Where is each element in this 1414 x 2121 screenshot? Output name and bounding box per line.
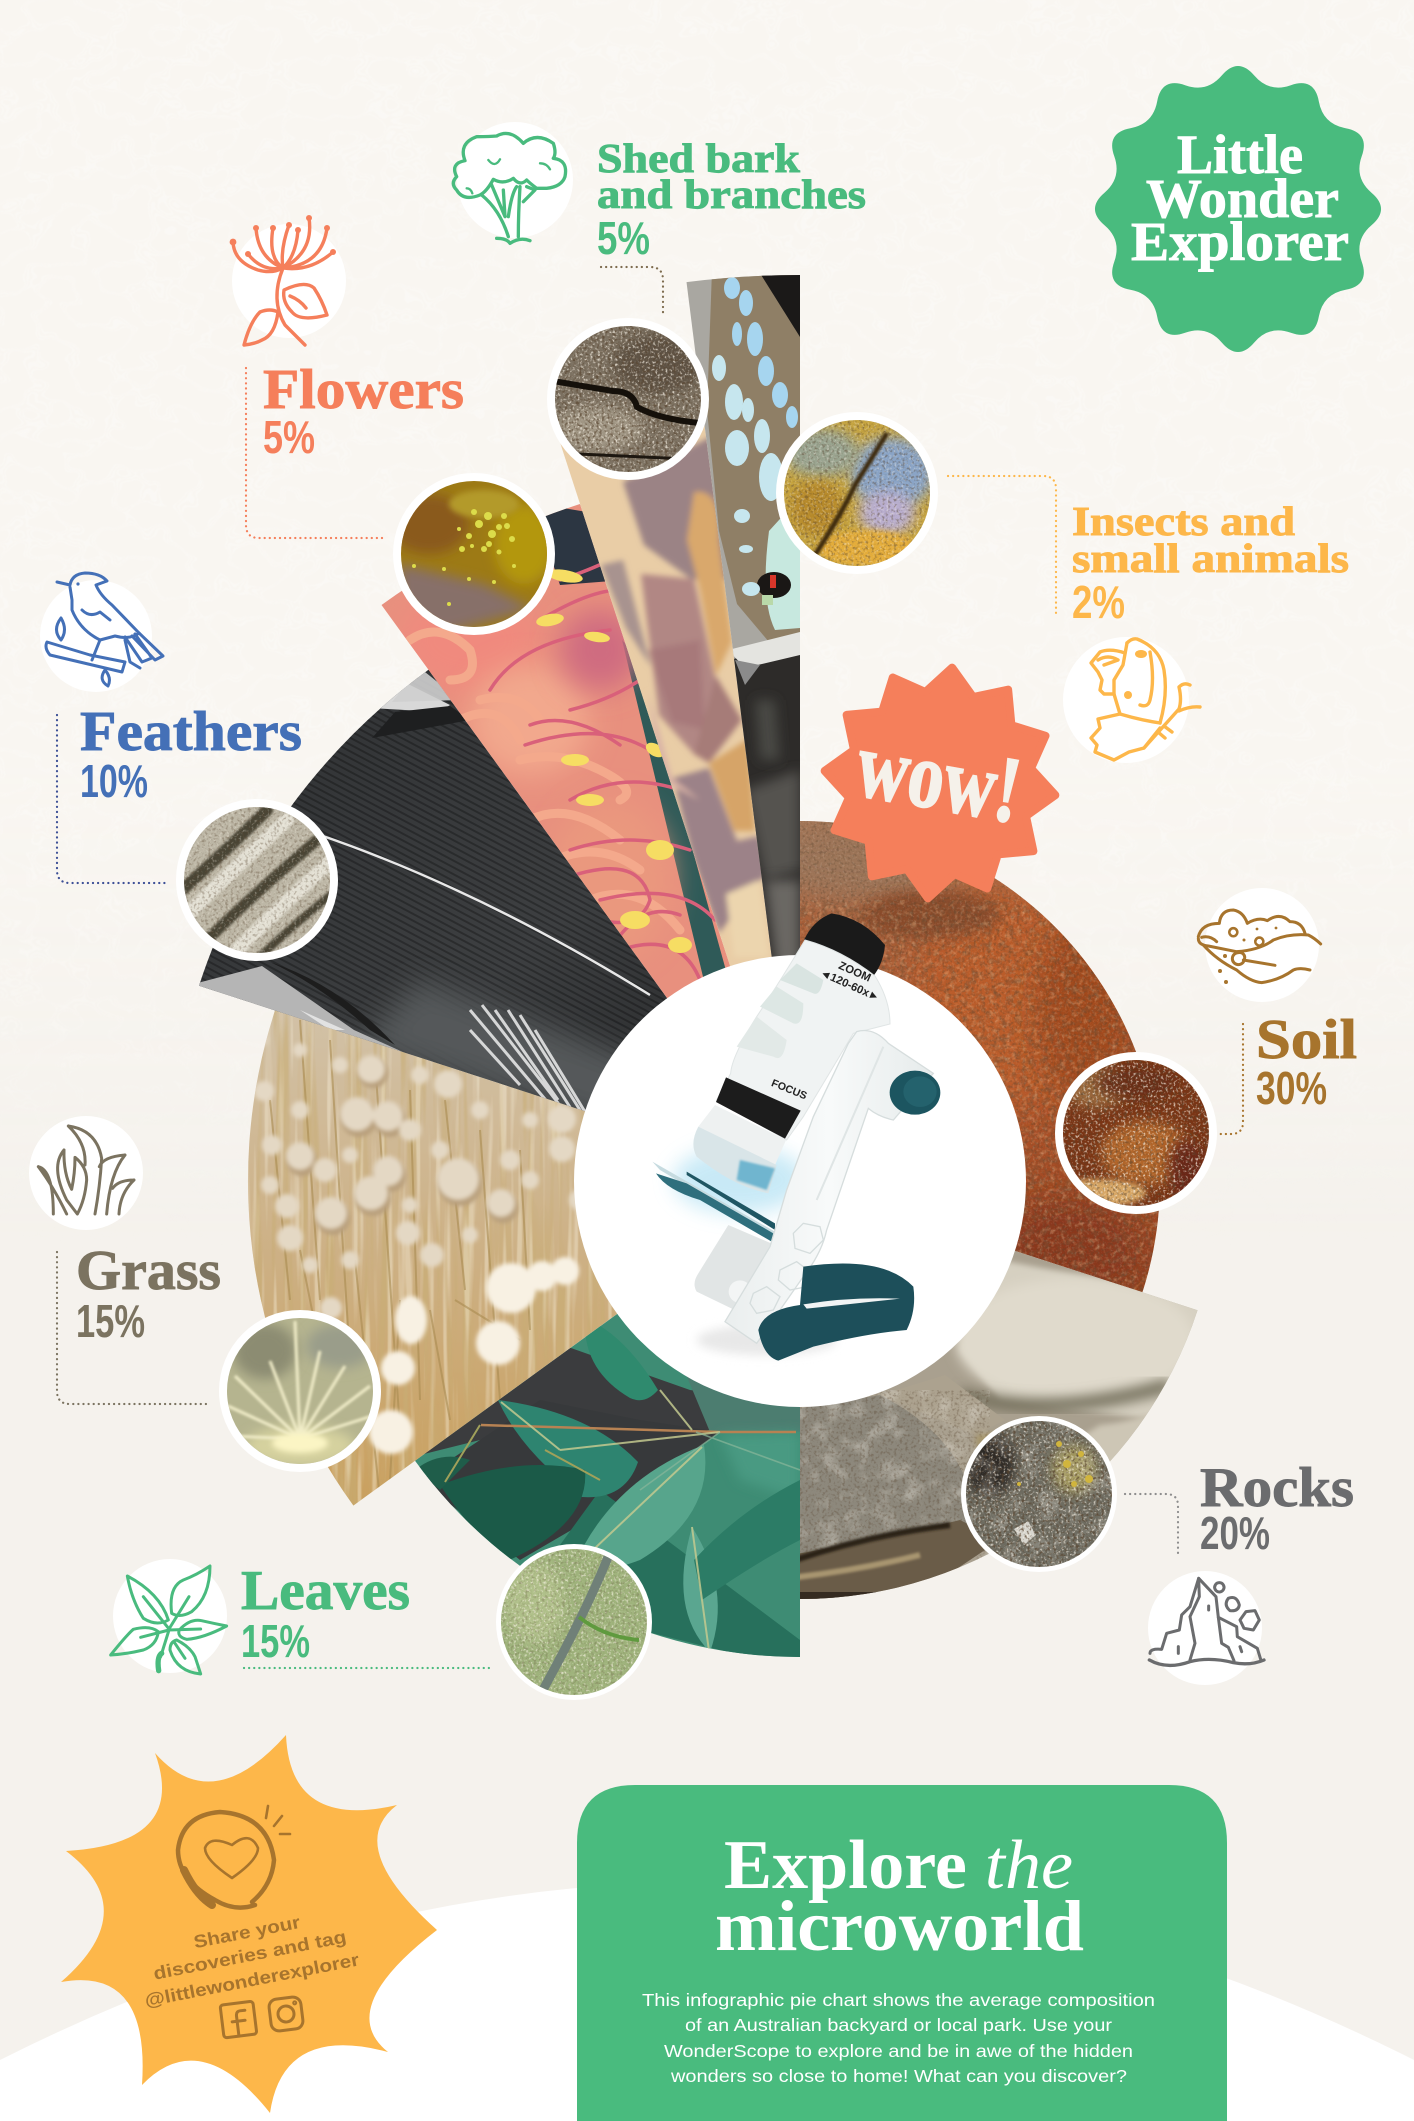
label: feathers: Feathers: [80, 701, 302, 763]
wow starburst: wow!: [849, 712, 1029, 843]
label: soil: 30%: [1256, 1062, 1327, 1114]
icon: tree: [453, 122, 573, 243]
icon: soil in hand: [1198, 888, 1321, 1002]
leader line: leaves: [244, 1667, 491, 1669]
label: feathers: 10%: [80, 755, 148, 807]
panel body text: WonderScope to explore and be in awe of the hidden: [664, 2041, 1133, 2061]
panel heading: microworld: [715, 1886, 1084, 1966]
label: insects and small animals: small animals: [1072, 535, 1349, 581]
callout circle: grass micro: [219, 1310, 381, 1472]
callout circle: bark micro: [547, 318, 709, 480]
label: shed bark and branches: and branches: [597, 171, 866, 217]
eyepiece cap: [804, 913, 885, 976]
microscope: ◄120-60x►: [818, 967, 881, 1004]
callout circle: insects micro: [776, 412, 938, 574]
label: flowers: 5%: [263, 411, 315, 463]
label: grass: [76, 1240, 221, 1347]
slide stage: [652, 1162, 775, 1237]
logo badge: Little Wonder Explorer: [1096, 67, 1380, 351]
panel body text: wonders so close to home! What can you discover?: [670, 2066, 1127, 2086]
icon: heart in speech ring: [178, 1806, 290, 1908]
leader line: rocks: [1125, 1494, 1178, 1557]
label: insects and small animals: [1072, 498, 1349, 628]
pie slice: grass 15%: [248, 1010, 618, 1506]
pie slice: rocks 20%: [800, 1250, 1198, 1599]
pie slice: feathers 10%: [199, 670, 668, 1112]
leader line: flowers: [246, 368, 385, 538]
label: shed bark and branches: [597, 135, 866, 264]
icon: grass: [29, 1116, 143, 1230]
label: rocks: 20%: [1200, 1507, 1270, 1559]
panel body text: [642, 1990, 1155, 2086]
label: shed bark and branches: Shed bark: [597, 135, 800, 181]
label: feathers: [80, 701, 302, 807]
base plate: [695, 1225, 775, 1313]
leader line: soil: [1218, 1024, 1243, 1134]
share text: [143, 1912, 361, 2011]
panel body text: of an Australian backyard or local park. Use your: [685, 2015, 1112, 2035]
label: rocks: Rocks: [1200, 1457, 1354, 1519]
share text: discoveries and tag: [152, 1927, 348, 1984]
label: leaves: 15%: [241, 1615, 310, 1667]
logo badge: Little Wonder Explorer: Little: [1177, 124, 1303, 185]
lower barrel: [698, 1105, 786, 1165]
pie slice: flowers 5%: [382, 504, 730, 998]
share text: Share your: [192, 1912, 302, 1952]
wow starburst: [813, 656, 1067, 910]
icon: instagram: [268, 1996, 304, 2032]
leader line: bark: [601, 267, 663, 316]
label: insects and small animals: Insects and: [1072, 498, 1295, 544]
logo badge: Little Wonder Explorer: Explorer: [1131, 211, 1349, 272]
pie slice: shed bark 5%: [560, 426, 772, 966]
label: leaves: Leaves: [241, 1560, 410, 1622]
lens: [693, 1127, 777, 1193]
panel heading: [715, 1827, 1084, 1966]
label: insects and small animals: 2%: [1072, 576, 1125, 628]
leader line: grass: [57, 1252, 210, 1404]
focus ring: [716, 1077, 801, 1139]
callout circle: feathers micro: [176, 799, 338, 961]
icon: butterfly: [1063, 637, 1200, 763]
icon: rocks: [1148, 1571, 1264, 1685]
knob: [890, 1071, 940, 1115]
callout circle: rocks micro: [961, 1416, 1117, 1572]
label: grass: 15%: [76, 1295, 145, 1347]
label: grass: Grass: [76, 1240, 221, 1302]
leader line: feathers: [57, 715, 168, 883]
icon: bird: [40, 573, 163, 692]
label: shed bark and branches: 5%: [597, 212, 650, 264]
panel body text: This infographic pie chart shows the average composition: [642, 1990, 1155, 2010]
label: soil: Soil: [1256, 1009, 1357, 1071]
callout circle: flowers micro: [389, 473, 555, 635]
label: soil: [1256, 1009, 1357, 1114]
icon: leaves: [111, 1559, 227, 1674]
label: flowers: [263, 359, 464, 463]
panel: explore the microworld: [577, 1785, 1227, 2121]
leader line: insects: [948, 476, 1056, 613]
label: flowers: Flowers: [263, 359, 464, 421]
logo badge: Little Wonder Explorer: Wonder: [1146, 168, 1339, 229]
stand arm: [725, 1031, 933, 1343]
panel heading: Explore the: [724, 1827, 1073, 1904]
callout circle: leaves micro: [496, 1544, 652, 1700]
label: leaves: [241, 1560, 410, 1667]
icon: facebook: [220, 2001, 257, 2038]
pie slice: leaves 15%: [415, 1314, 800, 1657]
microscope: FOCUS: [770, 1077, 809, 1102]
label: rocks: [1200, 1457, 1354, 1559]
share starburst: [61, 1735, 437, 2113]
centre white circle: [574, 955, 1026, 1407]
scope labels: ZOOM: [837, 960, 873, 985]
share text: @littlewonderexplorer: [143, 1949, 361, 2011]
pie slice: insects 2%: [686, 275, 800, 957]
scope body: [717, 940, 890, 1140]
icon: flower: [230, 215, 346, 345]
pie slice: soil 30%: [800, 821, 1159, 1292]
strap: [758, 1264, 914, 1361]
callout circle: soil micro: [1046, 1052, 1217, 1214]
microscope: [652, 913, 940, 1361]
